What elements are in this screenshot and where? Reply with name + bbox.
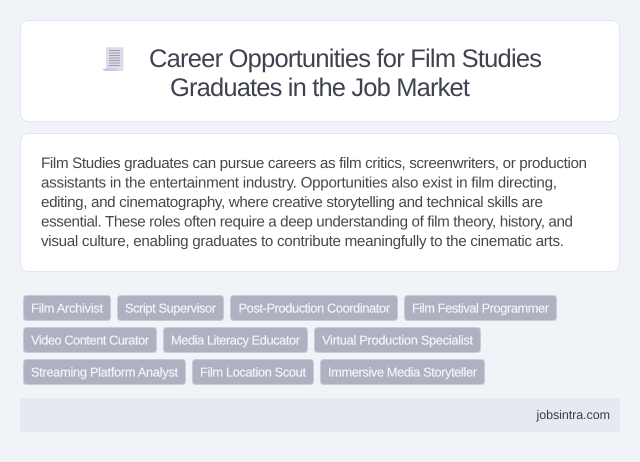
icon: document scroll: [103, 47, 124, 71]
title: Career Opportunities for Film Studies: [149, 45, 542, 73]
tag: Video Content Curator: [24, 328, 156, 352]
footer: [20, 398, 620, 432]
tag: Streaming Platform Analyst: Streaming Platform Analyst: [31, 364, 178, 380]
tags: [24, 296, 556, 384]
title: [149, 45, 542, 102]
footer source: jobsintra.com: [536, 408, 610, 422]
description text: [41, 155, 587, 250]
description text: assistants in the entertainment industry. Opportunities also exist in film directing,: [41, 174, 557, 192]
panel: header: [20, 20, 620, 122]
tag: Film Archivist: [24, 296, 110, 320]
tag: Immersive Media Storyteller: [320, 360, 484, 384]
description text: Film Studies graduates can pursue careers as film critics, screenwriters, or production: [41, 155, 587, 172]
tag: Streaming Platform Analyst: [24, 360, 186, 384]
tag: Post-Production Coordinator: [230, 296, 398, 320]
title: Graduates in the Job Market: [170, 74, 470, 102]
tag: Media Literacy Educator: Media Literacy Educator: [171, 332, 301, 348]
tag: Video Content Curator: Video Content Curator: [31, 332, 150, 348]
tag: Film Festival Programmer: Film Festival Programmer: [412, 300, 550, 316]
description text: essential. These roles often require a deep understanding of film theory, history, and: [41, 214, 573, 230]
description text: editing, and cinematography, where creative storytelling and technical skills are: [41, 194, 543, 211]
tag: Virtual Production Specialist: Virtual Production Specialist: [322, 332, 473, 348]
tag: Script Supervisor: Script Supervisor: [125, 300, 217, 316]
tag: Virtual Production Specialist: [314, 328, 480, 352]
tag: Film Location Scout: [192, 360, 314, 384]
tag: Film Location Scout: Film Location Scout: [200, 364, 306, 380]
tag: Film Archivist: Film Archivist: [31, 300, 103, 316]
panel: description: [20, 134, 620, 272]
tag: Film Festival Programmer: [404, 296, 556, 320]
tag: Media Literacy Educator: [164, 328, 308, 352]
tag: Script Supervisor: [118, 296, 224, 320]
tag: Immersive Media Storyteller: Immersive Media Storyteller: [328, 364, 478, 380]
description text: visual culture, enabling graduates to contribute meaningfully to the cinematic arts.: [41, 233, 564, 250]
tag: Post-Production Coordinator: Post-Production Coordinator: [238, 300, 391, 316]
